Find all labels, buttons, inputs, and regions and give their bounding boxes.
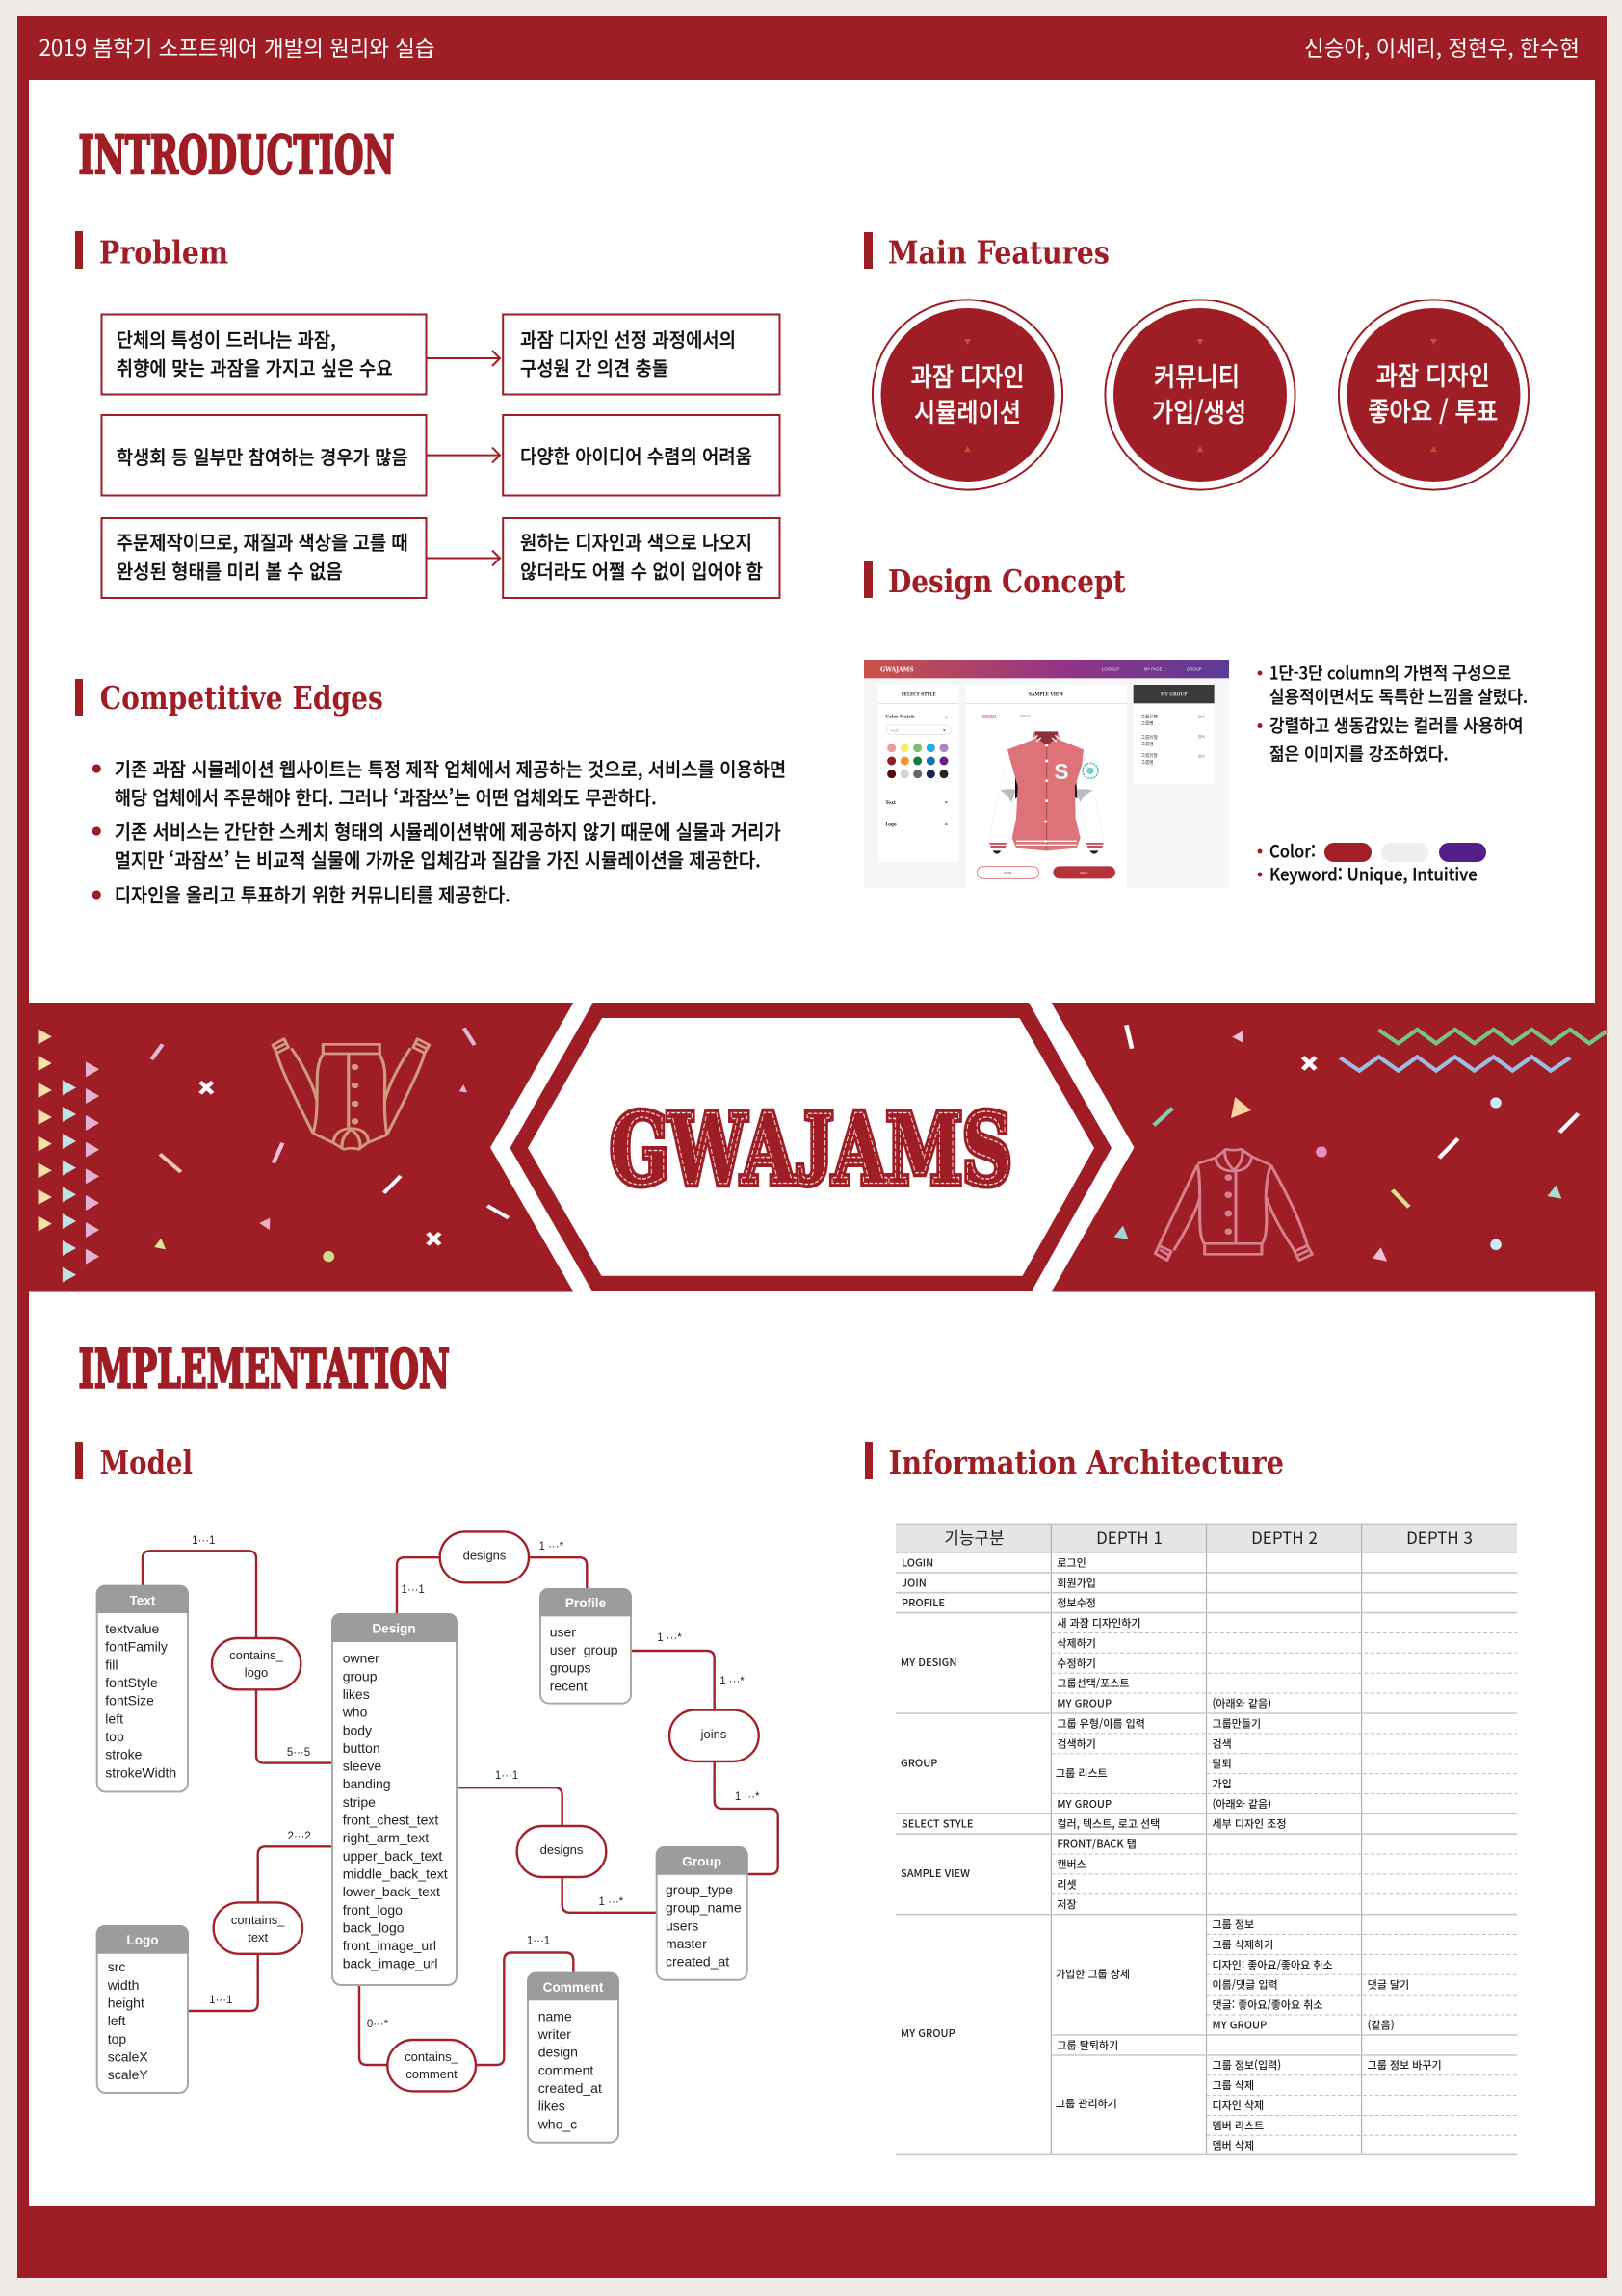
cardinality labels: 1 ···* [539, 1541, 564, 1552]
table header: DEPTH 3 [1406, 1525, 1473, 1549]
logo: gwajams: GWAJAMS [611, 1088, 1011, 1206]
entity: group [656, 1846, 748, 1980]
table depth 2 column: 멤버 삭제 [1212, 2138, 1254, 2153]
right confetti and zigzags [1114, 1025, 1607, 1262]
entity: group: group_type [666, 1882, 733, 1897]
screenshot mockup: SAMPLE VIEW [1029, 691, 1064, 697]
table depth 1 column: 그룹선택/포스트 [1057, 1676, 1130, 1691]
white panel: introduction [29, 80, 1595, 1003]
entity: design: right_arm_text [343, 1830, 429, 1845]
design notes text [1258, 661, 1528, 886]
feature circle 1 [873, 300, 1062, 490]
problem row 2: 다양한 아이디어 수렴의 어려움 [520, 441, 752, 469]
entity: text: fontSize [105, 1693, 154, 1709]
table header [896, 1524, 1517, 1552]
entity: design: back_logo [343, 1919, 405, 1935]
entity: design: button [343, 1740, 380, 1756]
relation: contains_text: contains_ [231, 1913, 285, 1927]
table depth 2 column: 세부 디자인 조정 [1212, 1816, 1287, 1832]
table depth 1 column: 수정하기 [1057, 1656, 1096, 1671]
relation: contains_logo [212, 1638, 301, 1689]
table depth 1 column: 그룹 관리하기 [1056, 2096, 1117, 2111]
entity: design: lower_back_text [343, 1884, 440, 1899]
screenshot mockup: S [1054, 759, 1069, 784]
table depth 2 column: 이름/댓글 입력 [1212, 1977, 1278, 1993]
screenshot mockup: 그룹유형 [1141, 752, 1158, 759]
relation: designs top [440, 1531, 529, 1582]
table depth 1 column: MY GROUP [1057, 1695, 1112, 1710]
screenshot mockup: 그룹유형 [1141, 734, 1158, 741]
panel: design concept [864, 561, 1528, 888]
table depth 1 column: MY GROUP [1057, 1796, 1112, 1812]
entity: comment: likes [538, 2099, 565, 2114]
heading: problem: Problem [99, 233, 228, 272]
entity: design: who [342, 1705, 368, 1720]
banner right piece [1052, 1003, 1607, 1292]
table first column: JOIN [902, 1575, 927, 1590]
heading: main features: Main Features [888, 234, 1110, 272]
table depth 2 column: 탈퇴 [1212, 1756, 1232, 1771]
cardinality labels: 1 ···* [719, 1676, 745, 1687]
table depth 1 column: 새 과잠 디자인하기 [1057, 1615, 1141, 1631]
table first column: PROFILE [902, 1595, 945, 1610]
entity: design: sleeve [343, 1759, 381, 1774]
cardinality labels: 1···1 [209, 1995, 232, 2006]
problem row 1: 단체의 특성이 드러나는 과잠, [117, 325, 336, 352]
entity: text: textvalue [105, 1621, 160, 1636]
entity: group: Group [682, 1855, 721, 1868]
heading: competitive edges: Competitive Edges [100, 679, 383, 717]
entity: comment: design [538, 2045, 578, 2060]
cardinality labels: 1···1 [527, 1936, 550, 1947]
table depth 1 column: 삭제하기 [1057, 1635, 1096, 1651]
table depth 3 column [1368, 1977, 1442, 2073]
table depth 1 column: 검색하기 [1057, 1735, 1096, 1751]
table depth 2 column: MY GROUP [1212, 2017, 1267, 2032]
screenshot mockup: body [891, 728, 899, 732]
table depth 3 column: 댓글 달기 [1368, 1977, 1409, 1993]
entity: design: Design [372, 1622, 416, 1635]
entity: design [331, 1613, 458, 1985]
table first column: SAMPLE VIEW [901, 1866, 970, 1881]
screenshot mockup: GWAJAMS [880, 665, 914, 673]
triangles column pink [86, 1061, 99, 1265]
table first column: LOGIN [902, 1554, 933, 1570]
white band behind banner [29, 1002, 1595, 1293]
entity: design: front_image_url [343, 1938, 436, 1953]
design notes text: 강렬하고 생동감있는 컬러를 사용하여 [1269, 713, 1524, 738]
entity: group: created_at [666, 1954, 729, 1970]
entity: design: body [343, 1722, 372, 1737]
panel: competitive edges [75, 679, 786, 907]
table depth 2 column: 그룹 정보 [1212, 1917, 1254, 1932]
screenshot mockup: SELECT STYLE [902, 691, 936, 697]
table depth 2 column [1212, 1695, 1333, 2153]
cardinality labels: 1···1 [495, 1770, 518, 1782]
problem row 3: 완성된 형태를 미리 볼 수 없음 [117, 557, 343, 584]
entity: comment: name [538, 2008, 572, 2023]
bullet list: competitive edges [92, 754, 786, 907]
feature circle 2: 가입/생성 [1152, 392, 1246, 430]
entity: text: strokeWidth [105, 1764, 176, 1780]
screenshot mockup: MY PAGE [1144, 666, 1162, 671]
entity: logo: left [108, 2013, 125, 2028]
table depth 1 column: 가입한 그룹 상세 [1056, 1967, 1130, 1982]
entity: comment: Comment [543, 1980, 604, 1995]
cardinality labels: 1 ···* [735, 1791, 760, 1803]
cardinality labels: 0···* [367, 2019, 389, 2030]
table depth 1 column: 리셋 [1057, 1876, 1077, 1892]
cardinality labels: 2···2 [288, 1831, 311, 1842]
entity: text: fontStyle [105, 1675, 158, 1690]
entity: design: likes [343, 1686, 370, 1702]
table depth 1 column [1056, 1554, 1160, 2111]
table depth 2 column: (아래와 같음) [1212, 1796, 1271, 1812]
entity: design: upper_back_text [343, 1848, 442, 1864]
connectors [143, 1551, 778, 2065]
table first column: MY DESIGN [901, 1655, 956, 1670]
entity: design: middle_back_text [343, 1866, 448, 1882]
screenshot mockup: NEW [1004, 871, 1012, 874]
table depth 2 column: 가입 [1212, 1776, 1232, 1791]
table depth 3 column: 그룹 정보 바꾸기 [1368, 2057, 1442, 2073]
header bar text: authors: 신승아, 이세리, 정현우, 한수현 [1304, 30, 1580, 63]
feature circle 2 [1105, 300, 1295, 490]
cardinality labels: 1 ···* [599, 1896, 624, 1908]
title: implementation: IMPLEMENTATION [79, 1337, 450, 1400]
banner: gwajams [17, 1003, 1607, 1292]
table header: DEPTH 1 [1096, 1525, 1163, 1549]
entity: comment: writer [537, 2026, 571, 2042]
feature circle 3 [1339, 300, 1529, 490]
table depth 1 column: 로그인 [1057, 1554, 1086, 1570]
entity: logo: width [107, 1977, 139, 1993]
table depth 2 column: 검색 [1212, 1735, 1232, 1751]
cardinality labels: 1 ···* [657, 1632, 682, 1644]
entity: profile: Profile [565, 1596, 607, 1610]
er diagram [96, 1531, 778, 2143]
table depth 2 column: (아래와 같음) [1212, 1695, 1271, 1710]
feature circle 2: 커뮤니티 [1154, 356, 1240, 394]
relation: designs middle: designs [540, 1842, 584, 1857]
entity: group: users [666, 1918, 698, 1933]
problem row 3 [102, 518, 780, 598]
table depth 1 column: 저장 [1057, 1896, 1077, 1912]
design notes text: 1단-3단 column의 가변적 구성으로 [1269, 661, 1511, 686]
banner left piece [17, 1003, 573, 1292]
entity: profile [539, 1588, 632, 1704]
entity: text: top [105, 1729, 124, 1744]
table depth 2 column: 그룹 삭제 [1212, 2077, 1254, 2093]
entity: design: front_chest_text [343, 1813, 438, 1828]
entity: text: left [105, 1710, 123, 1726]
table depth 1 column: 그룹 리스트 [1056, 1765, 1108, 1781]
relation: contains_logo: contains_ [229, 1648, 284, 1662]
problem row 1: 취향에 맞는 과잠을 가지고 싶은 수요 [117, 352, 393, 381]
center hexagon [510, 1003, 1112, 1292]
screenshot mockup: Text [885, 800, 897, 806]
relation: contains_comment [387, 2040, 476, 2091]
panel: main features [864, 232, 1529, 490]
panel: information architecture [865, 1442, 1517, 2154]
screenshot mockup: Color Match [885, 715, 915, 720]
entity: group: group_name [666, 1900, 742, 1916]
triangles column yellow [39, 1029, 52, 1232]
relation: contains_text: text [248, 1930, 269, 1944]
bullet list: competitive edges: 기존 서비스는 간단한 스케치 형태의 시뮬레이션밖에 제공하지 않기 때문에 실물과 거리가 [115, 817, 781, 845]
design notes text: Color: [1269, 838, 1316, 863]
entity: text: Text [130, 1593, 156, 1608]
problem row 3: 원하는 디자인과 색으로 나오지 [520, 528, 752, 555]
table depth 2 column: 그룹만들기 [1212, 1715, 1261, 1731]
screenshot mockup: 그룹명 [1141, 759, 1154, 766]
screenshot mockup: 그룹명 [1141, 741, 1154, 747]
screenshot mockup: 탈퇴 [1198, 753, 1205, 759]
heading: design concept: Design Concept [888, 562, 1126, 600]
icon: upside-down jacket [273, 1039, 430, 1149]
table depth 2 column: 그룹 삭제하기 [1212, 1937, 1273, 1952]
entity: text [96, 1585, 189, 1791]
table grid [896, 1524, 1517, 2154]
table depth 1 column: 그룹 탈퇴하기 [1057, 2038, 1118, 2053]
bullet list: competitive edges: 멀지만 ‘과잠쓰’ 는 비교적 실물에 가까운 입체감과 질감을 가진 시뮬레이션을 제공한다. [115, 846, 761, 873]
header bar text: course: 2019 봄학기 소프트웨어 개발의 원리와 실습 [39, 30, 435, 63]
problem row 1: 구성원 간 의견 충돌 [520, 352, 668, 381]
table [896, 1524, 1517, 2154]
table depth 2 column: 댓글: 좋아요/좋아요 취소 [1212, 1997, 1322, 2013]
entity: design: banding [343, 1776, 391, 1791]
icon: jacket [1155, 1149, 1312, 1261]
relation: contains_text [214, 1902, 302, 1954]
relation: contains_comment: contains_ [405, 2049, 459, 2064]
screenshot mockup: 그룹명 [1141, 719, 1154, 726]
jacket body [1007, 733, 1084, 850]
design notes text: 실용적이면서도 독특한 느낌을 살렸다. [1269, 684, 1528, 709]
problem row 3: 않더라도 어쩔 수 없이 입어야 함 [520, 557, 763, 584]
heading: model: Model [100, 1444, 193, 1481]
entity: logo [96, 1925, 189, 2093]
relation: designs top: designs [463, 1549, 507, 1562]
screenshot mockup: SAVE [1080, 871, 1088, 874]
screenshot mockup: BACK [1020, 714, 1031, 718]
feature circle 1: 시뮬레이션 [914, 392, 1021, 430]
table depth 3 column: (같음) [1368, 2017, 1395, 2032]
left confetti and triangles [39, 1028, 509, 1283]
bullet list: competitive edges: 디자인을 올리고 투표하기 위한 커뮤니티를 제공한다. [115, 880, 510, 907]
entity: logo: Logo [126, 1933, 159, 1947]
entity: logo: scaleY [108, 2067, 148, 2082]
feature circle 3: 좋아요 / 투표 [1368, 391, 1498, 429]
entity: profile: user_group [550, 1642, 618, 1657]
cardinality labels: 1···1 [192, 1535, 215, 1547]
screenshot mockup [864, 660, 1229, 888]
screenshot mockup: FRONT [982, 714, 997, 718]
zigzag blue [1340, 1057, 1570, 1071]
table depth 1 column: FRONT/BACK 탭 [1057, 1837, 1137, 1852]
screenshot mockup: 탈퇴 [1198, 715, 1205, 720]
relation: designs middle [517, 1826, 606, 1877]
feature circle 1: 과잠 디자인 [911, 356, 1025, 394]
entity: design: group [343, 1668, 378, 1683]
entity: design: stripe [343, 1794, 376, 1810]
table first column: GROUP [901, 1755, 937, 1770]
relation: contains_logo: logo [245, 1665, 268, 1680]
relation: joins [669, 1710, 759, 1761]
heading: information architecture: Information Architecture [889, 1444, 1284, 1481]
table depth 1 column: 캔버스 [1057, 1857, 1086, 1872]
table depth 1 column: 컬러, 텍스트, 로고 선택 [1057, 1816, 1160, 1832]
screenshot mockup: 그룹유형 [1141, 713, 1158, 719]
table depth 1 column: 정보수정 [1057, 1595, 1096, 1610]
entity: comment [527, 1972, 619, 2143]
panel: problem [75, 231, 780, 598]
table first column [901, 1554, 974, 2041]
entity: text: fontFamily [105, 1639, 168, 1655]
relation: joins: joins [700, 1727, 727, 1741]
problem row 2 [102, 415, 780, 495]
table depth 1 column: 회원가입 [1057, 1575, 1096, 1590]
cardinality labels: 5···5 [287, 1747, 310, 1759]
design notes text: 젊은 이미지를 강조하였다. [1269, 742, 1449, 767]
table first column: SELECT STYLE [902, 1816, 974, 1832]
entity: logo: top [108, 2031, 126, 2047]
design notes text: Keyword: Unique, Intuitive [1269, 861, 1478, 886]
screenshot mockup: 탈퇴 [1198, 734, 1205, 740]
entity: logo: scaleX [108, 2049, 148, 2065]
table depth 2 column: 디자인: 좋아요/좋아요 취소 [1212, 1957, 1333, 1972]
problem row 3: 주문제작이므로, 재질과 색상을 고를 때 [117, 528, 408, 555]
problem row 1 [102, 314, 780, 395]
entity: comment: who_c [537, 2116, 577, 2131]
title: introduction: INTRODUCTION [79, 123, 395, 186]
table header: 기능구분 [944, 1525, 1005, 1549]
white panel: implementation [29, 1292, 1595, 2206]
screenshot mockup: MY GROUP [1161, 691, 1188, 697]
panel: model [75, 1442, 778, 2143]
screenshot mockup: Logo [885, 822, 897, 827]
cardinality labels [192, 1535, 760, 2030]
entity: comment: comment [538, 2062, 593, 2077]
entity: profile: groups [550, 1660, 591, 1676]
screenshot mockup: LOGOUT [1102, 666, 1120, 671]
bullet list: competitive edges: 기존 과잠 시뮬레이션 웹사이트는 특정 제작 업체에서 제공하는 것으로, 서비스를 이용하면 [115, 754, 786, 782]
table depth 2 column: 그룹 정보(입력) [1212, 2057, 1281, 2073]
entity: logo: height [108, 1996, 144, 2011]
table depth 1 column: 그룹 유형/이름 입력 [1057, 1715, 1145, 1731]
triangles column teal [63, 1080, 76, 1283]
logo: gwajams: GWAJAMS [611, 1088, 1011, 1206]
bullet list: competitive edges: 해당 업체에서 주문해야 한다. 그러나 ‘과잠쓰’는 어떤 업체와도 무관하다. [115, 782, 657, 811]
entity: group: master [666, 1936, 707, 1951]
problem row 2: 학생회 등 일부만 참여하는 경우가 많음 [117, 442, 408, 470]
feature circle 3: 과잠 디자인 [1376, 355, 1490, 393]
screenshot mockup: GROUP [1187, 666, 1202, 671]
entity: profile: recent [550, 1678, 588, 1693]
entity: profile: user [550, 1624, 576, 1639]
relation: contains_comment: comment [406, 2067, 458, 2081]
entity: design: owner [343, 1651, 379, 1666]
entity: text: stroke [105, 1747, 143, 1762]
table header: DEPTH 2 [1251, 1525, 1318, 1549]
entity: comment: created_at [538, 2080, 602, 2096]
table depth 2 column: 멤버 리스트 [1212, 2118, 1264, 2133]
zigzag green [1378, 1030, 1607, 1043]
cardinality labels: 1···1 [402, 1584, 425, 1596]
entity: text: fill [105, 1657, 118, 1672]
table depth 2 column: 디자인 삭제 [1212, 2098, 1264, 2113]
jacket sleeves [989, 753, 1104, 843]
entity: logo: src [108, 1959, 125, 1974]
entity: design: back_image_url [343, 1956, 438, 1971]
color swatches [1324, 843, 1486, 862]
table first column: MY GROUP [901, 2025, 955, 2041]
problem row 1: 과잠 디자인 선정 과정에서의 [520, 325, 736, 352]
heading: model [75, 1442, 193, 1481]
entity: design: front_logo [343, 1902, 403, 1918]
